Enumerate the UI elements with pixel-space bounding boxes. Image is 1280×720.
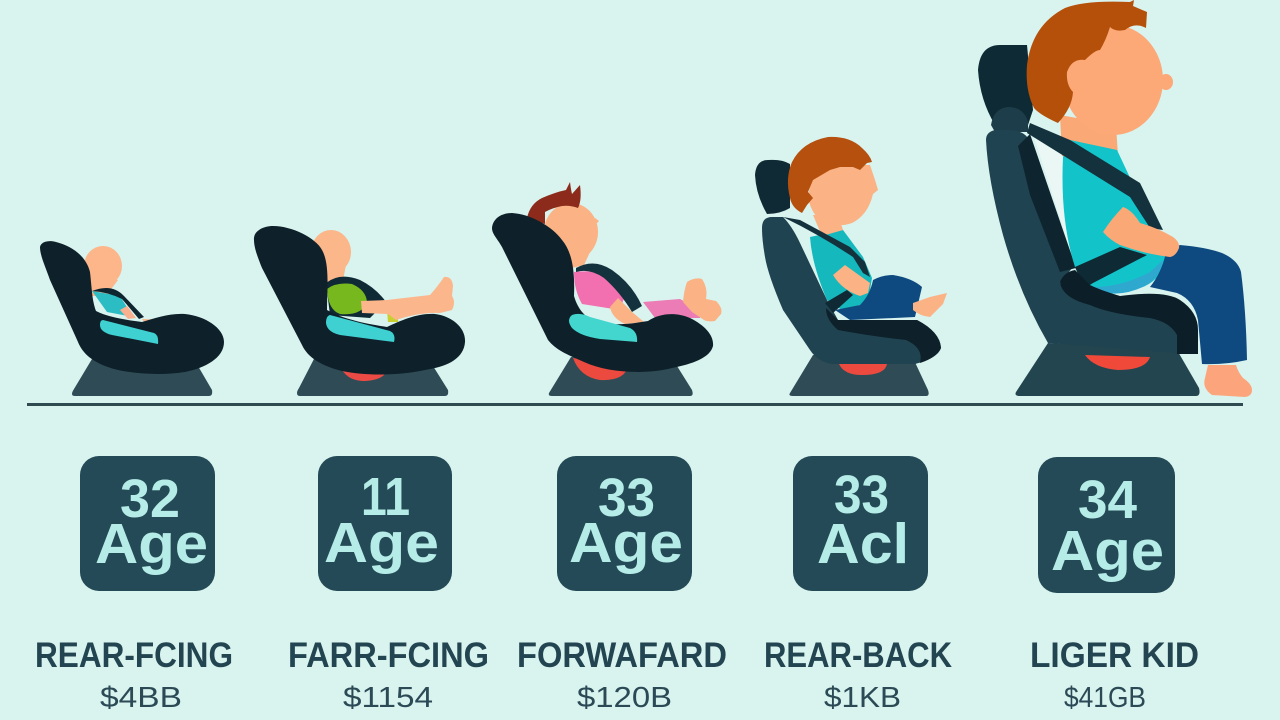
age badge: Age <box>569 511 683 575</box>
price: $4BB <box>100 682 182 714</box>
panel: stage 5 bigger kid <box>978 0 1252 714</box>
price: $120B <box>577 682 672 714</box>
age badge <box>557 456 692 591</box>
stage name: REAR-FCING <box>35 636 233 675</box>
age badge: Age <box>95 512 208 576</box>
age badge: 33 <box>598 468 655 528</box>
price: $1154 <box>343 682 433 714</box>
panel: stage 2 far-facing <box>254 226 489 714</box>
age badge: Age <box>1051 519 1164 583</box>
age badge <box>80 456 215 591</box>
price: $41GB <box>1064 682 1146 714</box>
illustration: big child in booster with seat belt <box>978 0 1252 397</box>
age badge: 34 <box>1078 470 1137 530</box>
illustration: baby in reclined seat <box>254 226 465 396</box>
panel: stage 1 rear-facing <box>35 241 233 714</box>
stage name: FORWAFARD <box>517 636 727 675</box>
stage name: FARR-FCING <box>288 636 489 675</box>
age badge: Age <box>324 511 439 575</box>
panel: stage 4 rear-back <box>755 137 952 714</box>
illustration: toddler in seat <box>492 182 721 396</box>
price: $1KB <box>824 682 901 714</box>
stage name: REAR-BACK <box>764 636 952 675</box>
age badge <box>793 456 928 591</box>
illustration: child in high-back booster <box>755 137 947 396</box>
stage name: LIGER KID <box>1030 636 1199 675</box>
age badge <box>318 456 452 591</box>
illustration: infant in rear-facing seat <box>40 241 224 396</box>
age badge: 33 <box>834 465 889 525</box>
age badge <box>1038 457 1175 593</box>
age badge: 11 <box>361 467 410 527</box>
age badge: 32 <box>120 469 180 529</box>
panel: stage 3 forward <box>492 182 727 714</box>
age badge: Acl <box>817 512 909 576</box>
